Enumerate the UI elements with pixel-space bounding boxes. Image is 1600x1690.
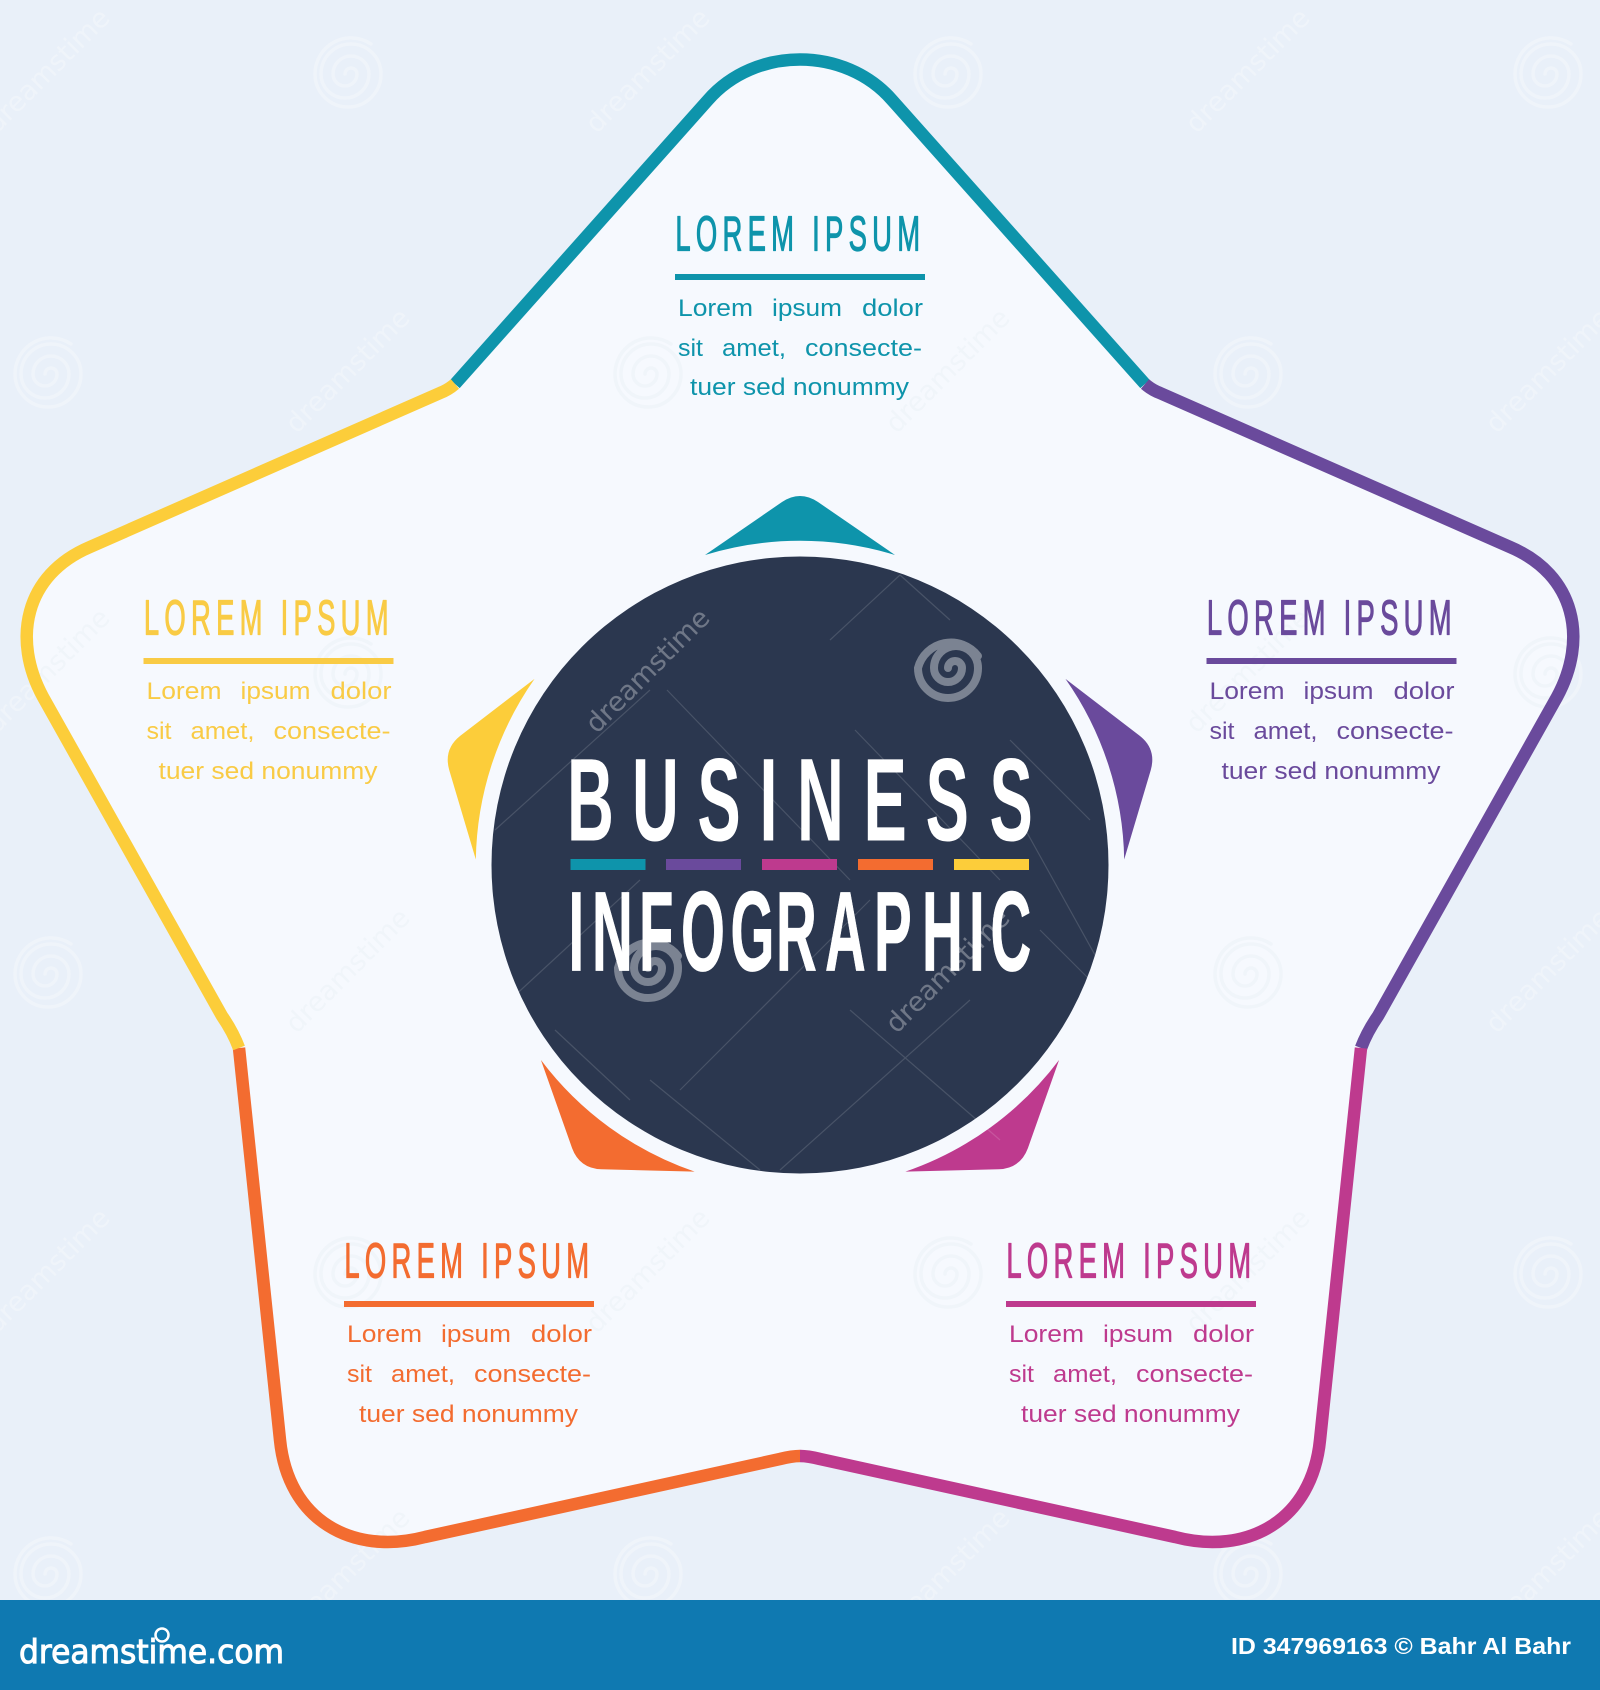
watermark text: dreamstime xyxy=(580,3,716,139)
footer logo: dreamstime.com xyxy=(19,1632,284,1671)
body text: consecte- xyxy=(1336,718,1454,745)
body text: Lorem xyxy=(1009,1321,1084,1348)
watermark text: dreamstime xyxy=(880,303,1016,439)
footer logo spiral xyxy=(156,1628,168,1642)
body text: amet, xyxy=(391,1361,455,1388)
block: yellow xyxy=(144,591,394,785)
rule xyxy=(344,1301,594,1307)
rule xyxy=(1006,1301,1256,1307)
watermark text: dreamstime xyxy=(280,903,416,1039)
heading: LOREM IPSUM xyxy=(1006,1234,1251,1289)
body text: ipsum xyxy=(772,295,842,322)
footer bar xyxy=(0,1600,1600,1690)
heading: LOREM IPSUM xyxy=(1207,591,1452,646)
body text: sit xyxy=(1210,718,1235,745)
rule xyxy=(675,274,925,280)
watermarks on circle: dreamstime xyxy=(880,903,1016,1039)
body text: Lorem xyxy=(146,678,222,705)
rule xyxy=(144,658,394,664)
outline segment: yellow xyxy=(27,384,455,1048)
watermark text: dreamstime xyxy=(280,1503,416,1639)
block: magenta xyxy=(1006,1234,1256,1428)
pointer: orange xyxy=(506,1060,695,1219)
body text: Lorem xyxy=(347,1321,422,1348)
body text: consecte- xyxy=(1136,1361,1253,1388)
body text: sit xyxy=(1009,1361,1034,1388)
body text: tuer sed nonummy xyxy=(1222,758,1440,785)
body text: dolor xyxy=(1394,678,1454,705)
body text: Lorem xyxy=(678,295,753,322)
block: orange xyxy=(344,1234,594,1428)
watermarks on circle: dreamstime xyxy=(580,603,716,739)
body text: consecte- xyxy=(474,1361,591,1388)
outline segment: orange xyxy=(239,1048,800,1542)
watermarks on circle xyxy=(580,603,1016,1039)
body text: tuer sed nonummy xyxy=(1021,1401,1240,1428)
title: BUSINESS: BUSINESS xyxy=(567,735,1033,867)
body text: Lorem xyxy=(1210,678,1284,705)
body text: ipsum xyxy=(240,678,310,705)
outline segment: magenta xyxy=(800,1048,1361,1542)
pointer: magenta xyxy=(905,1060,1094,1219)
body text: consecte- xyxy=(805,335,922,362)
body text: amet, xyxy=(190,718,254,745)
watermark text: dreamstime xyxy=(880,1503,1016,1639)
body text: tuer sed nonummy xyxy=(359,1401,578,1428)
heading: LOREM IPSUM xyxy=(344,1234,589,1289)
title: INFOGRAPHIC: INFOGRAPHIC xyxy=(568,868,1031,995)
body text: consecte- xyxy=(274,718,390,745)
body text: ipsum xyxy=(1304,678,1374,705)
rule xyxy=(1206,658,1456,664)
body text: amet, xyxy=(1053,1361,1117,1388)
body text: ipsum xyxy=(441,1321,511,1348)
watermark text: dreamstime xyxy=(1180,3,1316,139)
pointer: teal xyxy=(705,496,895,555)
pointer: purple xyxy=(1065,661,1180,860)
body text: dolor xyxy=(1193,1321,1254,1348)
watermark text: dreamstime xyxy=(1180,603,1316,739)
body text: ipsum xyxy=(1103,1321,1173,1348)
block: purple xyxy=(1206,591,1456,785)
body text: dolor xyxy=(330,678,392,705)
block: teal xyxy=(675,207,925,401)
central circle xyxy=(492,556,1108,1174)
body text: dolor xyxy=(531,1321,592,1348)
color rule bars xyxy=(570,859,1029,870)
heading: LOREM IPSUM xyxy=(675,207,920,262)
watermark text: dreamstime xyxy=(1180,1203,1316,1339)
heading: LOREM IPSUM xyxy=(144,591,389,646)
circle title xyxy=(567,735,1033,995)
body text: amet, xyxy=(1254,718,1318,745)
body text: dolor xyxy=(862,295,923,322)
body text: tuer sed nonummy xyxy=(690,374,909,401)
watermark text: dreamstime xyxy=(280,303,416,439)
body text: amet, xyxy=(722,335,786,362)
footer credit: ID 347969163 © Bahr Al Bahr xyxy=(1231,1633,1571,1659)
central pointers xyxy=(420,496,1180,1219)
body text: sit xyxy=(146,718,172,745)
body text: tuer sed nonummy xyxy=(158,758,378,785)
body text: sit xyxy=(678,335,703,362)
pointer: yellow xyxy=(420,661,535,860)
outline segment: purple xyxy=(1145,384,1573,1048)
watermark text: dreamstime xyxy=(580,1203,716,1339)
body text: sit xyxy=(347,1361,372,1388)
outline segment: teal xyxy=(455,60,1145,384)
